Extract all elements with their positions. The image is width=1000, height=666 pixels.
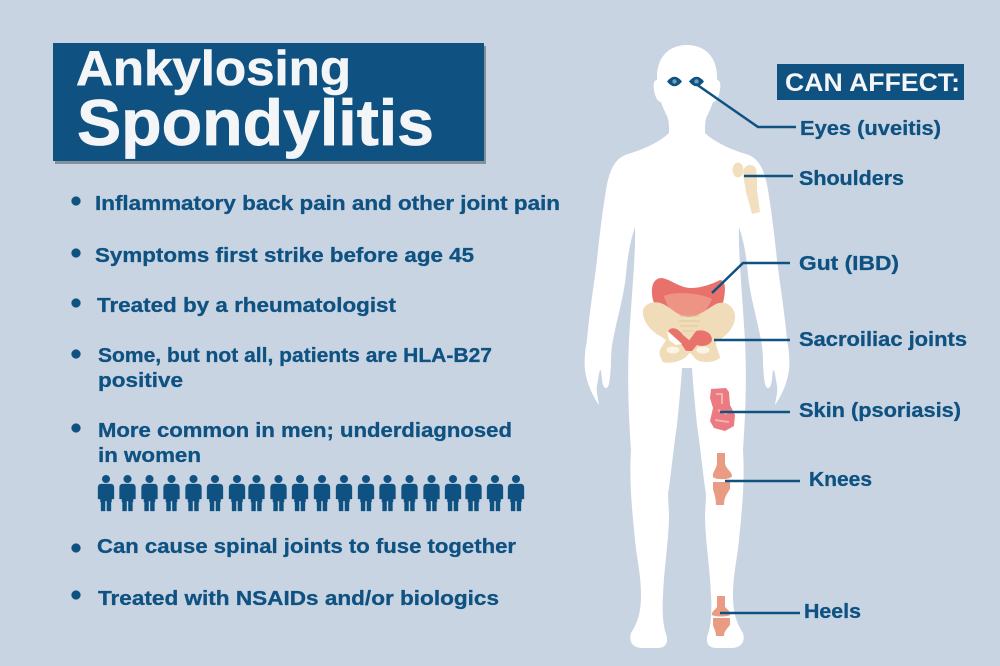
title banner: Ankylosing bbox=[76, 42, 351, 96]
can affect heading: CAN AFFECT: bbox=[785, 69, 960, 97]
bullet: HLA-B27 bbox=[72, 345, 492, 392]
bullet: men and women bbox=[72, 420, 512, 467]
label: skin: Skin (psoriasis) bbox=[799, 400, 961, 422]
bullet: treatment: Treated with NSAIDs and/or biologics bbox=[98, 588, 499, 610]
bullet: fuse: Can cause spinal joints to fuse together bbox=[97, 536, 516, 558]
icon: knee joint bbox=[713, 453, 732, 505]
title banner: Spondylitis bbox=[77, 86, 434, 159]
icon: eyes bbox=[667, 77, 704, 86]
icon: pelvis bbox=[643, 302, 735, 363]
label: sacroiliac: Sacroiliac joints bbox=[799, 329, 967, 351]
can affect heading bbox=[777, 64, 964, 100]
icon: gut bbox=[652, 278, 725, 322]
icon: skin patch bbox=[710, 388, 735, 431]
symptom bullet list bbox=[72, 193, 560, 610]
bullet: HLA-B27: Some, but not all, patients are HLA-B27 bbox=[98, 345, 492, 367]
title banner bbox=[53, 42, 486, 164]
body silhouette bbox=[585, 45, 789, 648]
icon: shoulder bone bbox=[732, 162, 760, 214]
leader lines bbox=[696, 84, 800, 613]
label: knees: Knees bbox=[809, 469, 872, 491]
affected area labels bbox=[799, 118, 967, 623]
label: gut: Gut (IBD) bbox=[799, 253, 899, 275]
bullet: men and women: in women bbox=[98, 445, 201, 467]
bullet: age: Symptoms first strike before age 45 bbox=[95, 245, 474, 267]
bullet: rheumatologist: Treated by a rheumatologist bbox=[97, 295, 396, 317]
bullet: men and women: More common in men; underdiagnosed bbox=[98, 420, 512, 442]
icon: heel joint bbox=[712, 596, 730, 636]
bullet: back pain: Inflammatory back pain and other joint pain bbox=[95, 193, 560, 215]
label: shoulders: Shoulders bbox=[799, 168, 904, 190]
row of people icons bbox=[98, 475, 524, 511]
label: heels: Heels bbox=[804, 601, 861, 623]
label: eyes: Eyes (uveitis) bbox=[800, 118, 941, 140]
bullet: HLA-B27: positive bbox=[98, 370, 183, 392]
